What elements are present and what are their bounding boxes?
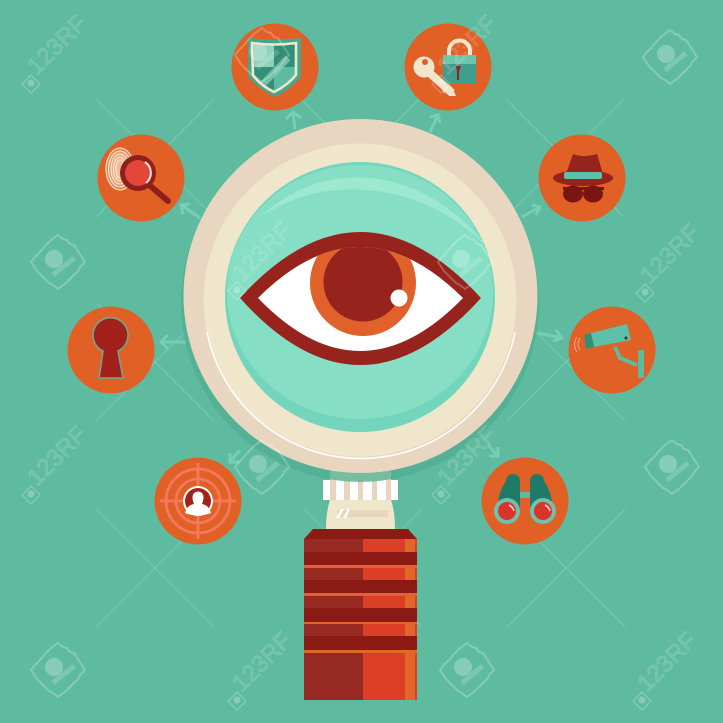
key [414,56,456,96]
wireless signal [574,337,580,352]
icon: keyhole [68,306,154,394]
magnifier handle neck [323,465,398,529]
arrow: to target [230,450,240,462]
arrow: to shield [286,112,301,129]
arrow: to fingerprint [181,204,200,218]
decorative crossing lines [96,99,625,627]
watermark logos: 123RF [632,627,702,697]
watermark logos: 123RF [432,421,502,491]
watermark logos: 123RF [227,627,297,697]
eye [240,230,481,365]
arrow: to spy hat [522,205,540,217]
padlock [443,40,476,83]
icon: key and padlock [404,24,492,110]
watermark logos: 123RF [635,219,705,289]
watermark logos: 123RF [432,10,502,80]
icon: fingerprint under magnifier [98,134,184,222]
icon: spy hat and glasses [538,134,626,222]
arrows around the magnifier [161,112,562,462]
arrow: to key and lock [430,115,440,132]
magnifier handle [304,529,417,700]
icon: security camera [568,306,656,394]
watermark logos: 123RF [227,217,297,287]
icon: target with person [154,458,242,544]
white collar [323,480,398,500]
icon: binoculars [482,458,568,544]
magnifier lens [181,119,539,482]
arrow: to keyhole [161,335,186,349]
arrow: to camera [538,330,562,341]
icon: shield [232,24,318,110]
watermark logos: 123RF [22,10,92,80]
watermark logos: 123RF [22,421,92,491]
arrow: to binoculars [488,445,498,456]
